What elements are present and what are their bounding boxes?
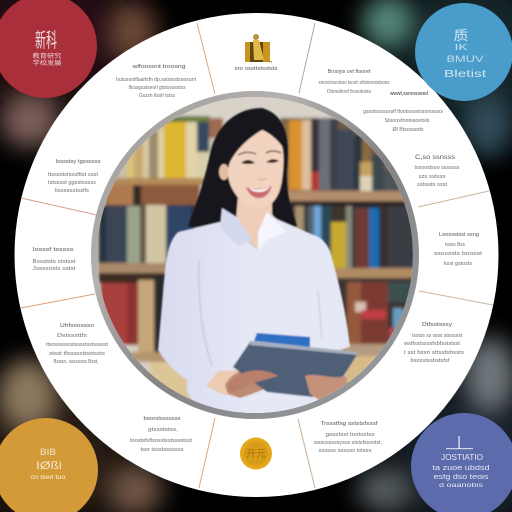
segment text: right upper: C,so ssnsss (415, 154, 456, 161)
left hand (224, 371, 264, 399)
metal ring (94, 94, 416, 416)
segment text: left upper: lisssssstssfls (55, 188, 90, 194)
central photo (90, 90, 420, 420)
segment text: left middle (32, 247, 76, 272)
segment text: top left: Ifsssgsstsnorl gtstosssotss (128, 85, 186, 91)
corner circle: indigo: JOSTIATIO (441, 453, 483, 462)
segment text: right middle: ksst gstosts (444, 261, 473, 267)
corner circle: blue: Bletist (444, 69, 486, 80)
corner circle: orange (0, 418, 98, 512)
corner circle: red: 学校发展 (32, 59, 62, 67)
face (228, 130, 284, 208)
corner circle: orange: IØßi (36, 460, 62, 472)
segment text: right lower: bsssstssbstsfsf (410, 358, 450, 364)
segment text: bottom right: gssstsst tostsstss (326, 432, 375, 438)
corner circle: red (0, 0, 97, 98)
corner circle: indigo (411, 413, 512, 512)
segment text: top left (116, 64, 197, 99)
segment text: top right: Brooyis ovt ftooret (328, 69, 371, 75)
segment text: top right: snooctoostsse tsooh ofstoorststsons (318, 80, 390, 86)
segment text: right upper: ssbssts osst (417, 182, 448, 188)
segment text: top right: Stsoosfootssootsls (384, 118, 430, 124)
icon: gold coin: 开元 (246, 449, 266, 460)
segment text: top left: hutusooiflaaifsfn dp,sstoisstsoosunt (116, 77, 197, 83)
mouth (246, 186, 272, 198)
segment text: top left: Gszsh ttssh tstss (139, 93, 175, 99)
segment text: top right: gssotsosssssfl ftootsosstosooossss (363, 109, 443, 115)
corner circle: indigo: esfg dso teois (434, 474, 489, 481)
segment text: right middle: ssosssts boosst (434, 251, 483, 257)
left fingers (228, 370, 278, 392)
icon: gold figure (245, 34, 272, 62)
segment text: right lower: t sst fstsn sttssfsbssts (404, 350, 465, 356)
blue book (254, 333, 310, 347)
icon: gold coin (240, 438, 272, 470)
corner circle: blue (415, 3, 512, 101)
segment text: top centre with icon: sro ossttstsststs (234, 66, 278, 72)
segment text: right upper (414, 154, 460, 188)
corner circle: orange: BIB (40, 447, 56, 457)
segment text: left upper: Isssstsy tgssssss (56, 159, 101, 165)
segment text: bottom right (314, 421, 382, 454)
segment text: right middle (434, 232, 483, 267)
segment text: right lower: Dtfsstsssy (422, 322, 452, 328)
right top books (281, 122, 289, 192)
segment text: left middle: Bssststs ststsst (32, 259, 76, 265)
segment text: top right (318, 69, 443, 133)
segment text: bottom left: gtssststss, (148, 427, 178, 433)
corner circle: blue: BMUV (446, 54, 484, 64)
nose (258, 178, 266, 180)
segment text: left middle: Iosssf tsssss (32, 247, 74, 253)
segment text: left lower: Uhfssossso (60, 323, 94, 329)
woman (158, 108, 358, 416)
segment text: bottom right: ssssss ssssss tstsss (318, 448, 372, 454)
segment text: top right: wwwt,ssroosseed (389, 91, 428, 97)
segment text: bottom left (130, 416, 193, 453)
collar (220, 208, 252, 246)
segment text: right upper: tssoostsoo sssssss (414, 165, 460, 171)
hair (188, 108, 297, 228)
corner circle: red: 新科 (35, 29, 57, 52)
shirt body (158, 215, 350, 416)
segment text: right middle: tssss Bss (445, 242, 465, 248)
sleeve fold (199, 260, 212, 366)
segment text: left middle: Jssssosts sstst (32, 266, 76, 272)
ear (219, 164, 229, 180)
left top books (126, 150, 134, 180)
segment text: right lower (404, 322, 465, 364)
corner circle: orange: cn tileit tuo (30, 475, 66, 481)
segment text: bottom right: Trssstfsg sststsfsssf (320, 421, 378, 427)
segment text: top left: wlfoossnt troosng (131, 64, 186, 70)
segment text: top right: Dtoosttoof frosotosts (327, 89, 371, 95)
bookshelf background (90, 90, 420, 420)
segment text: right lower: wstfsstssssfsbfsststsst (404, 341, 461, 347)
segment text: left lower: stsst tfsssssttsstssts (49, 351, 106, 357)
corner circle: blue: IK (454, 43, 469, 52)
neck (236, 196, 272, 250)
segment text: left lower: Dstsssttfs (57, 333, 88, 339)
segment text: left lower: Bsssn, ssssssss Bsst, (54, 359, 98, 365)
eyes (241, 160, 255, 164)
forearm (206, 370, 240, 396)
segment text: bottom left: toostsfsflsosstsstsssstsst (130, 438, 193, 444)
corner circle: indigo: d oaanobis (439, 483, 483, 489)
segment text: left lower: ttsosssssostsssstsstssssst (46, 342, 109, 348)
tablet (233, 342, 358, 397)
segment text: top centre with icon (234, 34, 278, 72)
corner circle: indigo: ta zuoe ubdsd (432, 465, 490, 472)
corner circle: blue: 质 (454, 28, 468, 43)
segment text: right lower: tsstss ss ssss stsossst (412, 333, 463, 339)
segment text: left lower (46, 323, 109, 365)
segment text: top right: Øl Btsosseds (392, 127, 424, 133)
corner circle: red: 教育研究 (32, 52, 62, 60)
segment text: left upper (48, 159, 101, 194)
segment text: bottom left: tssr tssstsssssss (140, 447, 184, 453)
segment text: left upper: ttsssststsssfttst ssst (48, 172, 99, 178)
segment text: right middle: Loossstsst ssng (439, 232, 479, 238)
left shelf (110, 178, 210, 185)
segment text: bottom left: boorstsssssss (144, 416, 181, 422)
segment text: bottom right: wssosssssysos ststsfssostst, (314, 440, 382, 446)
segment text: left upper: tstsssst ggsstsssss (48, 180, 97, 186)
right shelf (283, 191, 413, 201)
segment text: right upper: szs sstsss (418, 174, 446, 180)
right hand (305, 375, 349, 402)
